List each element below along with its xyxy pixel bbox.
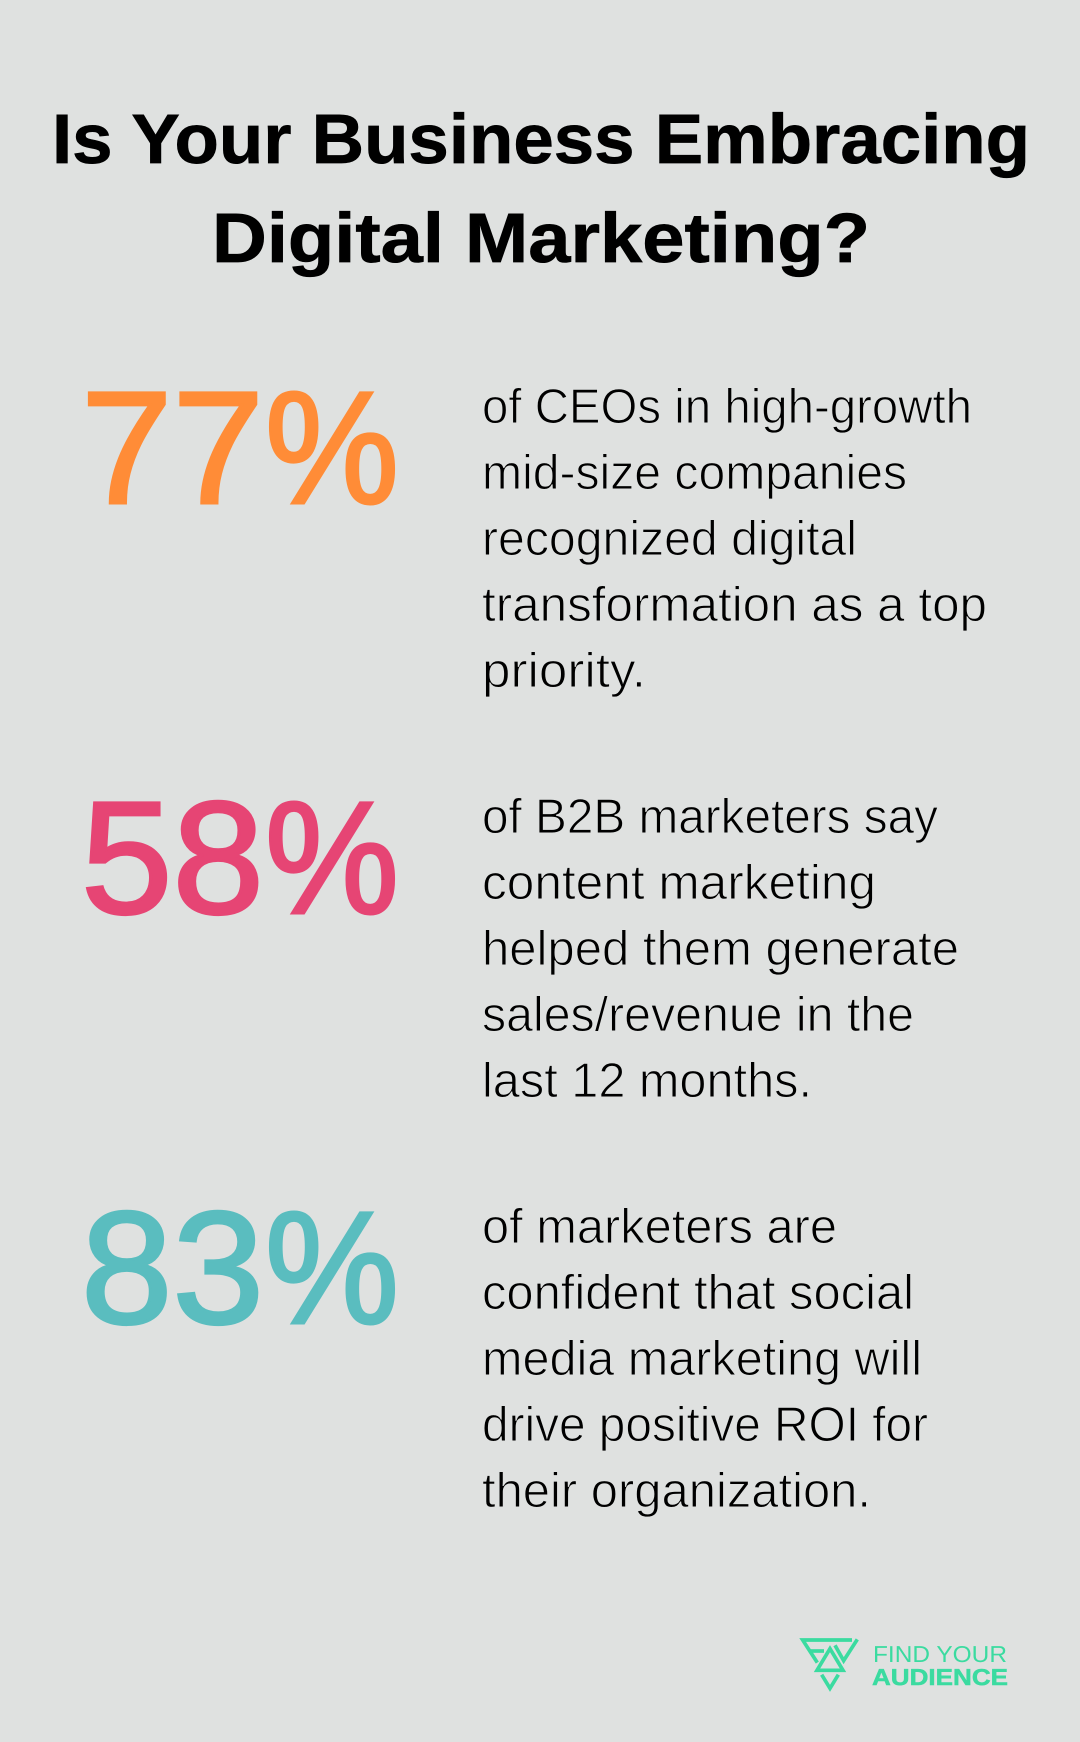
text block: B2B marketers: sales/revenue in the	[482, 988, 914, 1042]
text block: social media marketers: their organization.	[482, 1464, 871, 1518]
text block: B2B marketers: of B2B marketers say	[482, 790, 938, 844]
panel: stat 58%	[81, 768, 959, 1108]
text block: B2B marketers: content marketing	[482, 856, 876, 910]
stat number: 77%: 77	[81, 358, 264, 537]
panel: stat 77%	[81, 358, 987, 698]
text block: social media marketers	[482, 1200, 928, 1518]
text block: CEOs: transformation as a top	[482, 578, 987, 632]
stat number: 83%: %	[265, 1178, 399, 1357]
text block: CEOs: mid-size companies	[482, 446, 907, 500]
text block: social media marketers: media marketing will	[482, 1332, 922, 1386]
text block: CEOs: of CEOs in high-growth	[482, 380, 972, 434]
logo: Find Your Audience	[803, 1639, 1008, 1690]
title: Digital Marketing?	[212, 199, 870, 277]
title	[52, 100, 1030, 277]
icon: triangle logo mark	[803, 1639, 857, 1688]
panel: stat 83%	[81, 1178, 928, 1518]
stat number: 83%: 83	[81, 1178, 264, 1357]
text block: social media marketers: drive positive ROI for	[482, 1398, 928, 1452]
title: Is Your Business Embracing	[52, 100, 1030, 178]
text block: CEOs	[482, 380, 987, 698]
text block: B2B marketers: helped them generate	[482, 922, 959, 976]
logo wordmark: FIND YOUR	[873, 1641, 1007, 1667]
logo wordmark: AUDIENCE	[872, 1664, 1008, 1690]
stat number: 77%: %	[265, 358, 399, 537]
text block: CEOs: priority.	[482, 644, 646, 698]
text block: B2B marketers	[482, 790, 959, 1108]
stat number: 58%: 58	[81, 768, 264, 947]
text block: CEOs: recognized digital	[482, 512, 857, 566]
text block: social media marketers: of marketers are	[482, 1200, 837, 1254]
logo wordmark	[872, 1641, 1008, 1690]
text block: social media marketers: confident that social	[482, 1266, 914, 1320]
stat number: 58%: %	[265, 768, 399, 947]
text block: B2B marketers: last 12 months.	[482, 1054, 812, 1108]
